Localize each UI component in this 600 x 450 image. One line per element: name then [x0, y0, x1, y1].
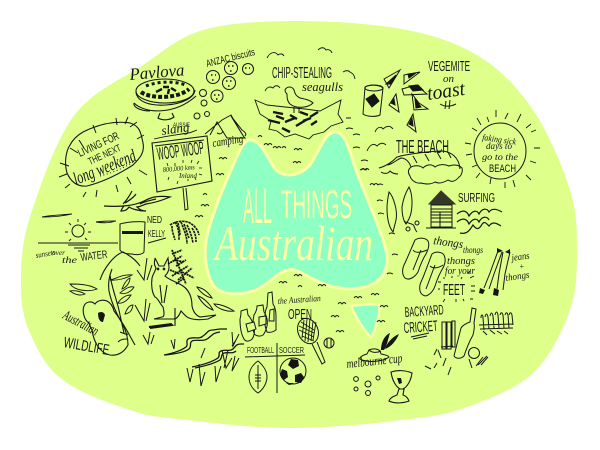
thongs text: [433, 233, 483, 302]
chip-stealing seagulls: seagulls: [302, 79, 343, 94]
the beach: [379, 137, 462, 184]
football and soccer: [245, 343, 306, 393]
backyard cricket: [403, 301, 444, 339]
football and soccer: FOOTBALL: [247, 346, 274, 355]
bottles: [240, 292, 276, 341]
backyard cricket: CRICKET: [403, 318, 438, 337]
vegemite on toast: toast: [426, 78, 467, 105]
backyard cricket: BACKYARD: [404, 301, 444, 320]
water ripples: [195, 118, 398, 332]
koala: WILDLIFE: [62, 334, 111, 359]
jeans and thongs: jeans: [509, 251, 530, 264]
thongs text: thongs: [447, 255, 475, 267]
thongs: [403, 238, 445, 296]
title: [213, 178, 373, 271]
woop woop sign: [152, 136, 212, 210]
aussie slang: AUSSIE: [173, 123, 190, 129]
koala: [60, 252, 140, 359]
sunset over the water: WATER: [80, 249, 108, 264]
chip-stealing seagulls: [255, 65, 343, 139]
jeans and thongs: thongs: [505, 270, 530, 284]
koala: Australian: [60, 308, 101, 339]
melbourne cup: melbourne cup: [346, 350, 403, 371]
eucalyptus leaves: [197, 287, 234, 311]
surfboards: [387, 187, 419, 232]
snakes: [164, 329, 244, 368]
grass tufts: [135, 258, 239, 386]
Tasmania: [351, 304, 379, 337]
chip-stealing seagulls: CHIP-STEALING: [272, 65, 332, 82]
sun: faking sick days: go to the: [482, 152, 518, 162]
the australian open: the Australian: [277, 293, 321, 306]
vegemite on toast: on: [443, 73, 454, 85]
kangaroo: [149, 258, 216, 328]
gum leaves branch: [104, 191, 170, 211]
title: Australian: [213, 215, 373, 271]
stumps bat ball fence: [425, 308, 513, 375]
sun: faking sick days: BEACH: [489, 163, 516, 175]
jeans and thongs: [479, 248, 530, 296]
woop woop sign: 800,000 kms: [162, 163, 195, 174]
surfing: SURFING: [458, 190, 495, 205]
the australian open: [277, 293, 321, 323]
tennis racket and ball: [294, 315, 334, 364]
living for the next long weekend sun: THE NEXT: [87, 143, 123, 168]
woop woop sign: Inland: [178, 172, 197, 180]
ned kelly helmet and text: KELLY: [148, 229, 165, 240]
title: ALL: [243, 178, 272, 234]
thongs text: thongs: [463, 245, 483, 255]
camping tent: [205, 115, 246, 150]
vegemite on toast: [363, 58, 470, 132]
ANZAC biscuits: ANZAC biscuits: [205, 47, 256, 70]
surfing: [457, 190, 502, 233]
gum trees: [168, 221, 199, 284]
aussie slang: [154, 119, 197, 139]
sunset over the water: over: [52, 249, 65, 257]
pavlova: Pavlova: [128, 60, 185, 84]
sunset over the water: sunsets: [35, 248, 56, 260]
sunset over the water: the: [62, 255, 77, 265]
camping tent: camping: [211, 131, 244, 150]
aussie slang: slang: [160, 119, 191, 138]
living for the next long weekend sun: [59, 117, 147, 197]
sun: faking sick days: faking sick: [482, 132, 518, 147]
thongs text: for your: [445, 266, 475, 277]
pavlova: [128, 60, 196, 120]
vegemite on toast: VEGEMITE: [428, 58, 470, 75]
ned kelly helmet and text: NED: [147, 215, 162, 226]
ANZAC biscuits: [194, 47, 256, 119]
football and soccer: SOCCER: [279, 346, 304, 355]
thongs text: FEET: [443, 282, 465, 299]
the beach: THE BEACH: [396, 137, 449, 157]
sunset over the water: [35, 214, 118, 265]
map of Australia: [205, 132, 387, 294]
sun: faking sick days: days to: [486, 141, 513, 151]
sun: faking sick days: [465, 110, 540, 188]
ned kelly helmet and text: [120, 215, 166, 255]
title: THINGS: [281, 183, 352, 227]
thongs text: thongs: [433, 233, 465, 251]
jeans and thongs: +: [519, 262, 524, 271]
living for the next long weekend sun: LIVING FOR: [76, 130, 121, 160]
beach hut: [426, 191, 456, 228]
text: WOOP WOOP: [156, 138, 205, 164]
birds: [265, 48, 393, 151]
melbourne cup: [346, 333, 412, 403]
living for the next long weekend sun: long weekend: [70, 145, 139, 189]
the australian open: OPEN: [288, 306, 312, 323]
